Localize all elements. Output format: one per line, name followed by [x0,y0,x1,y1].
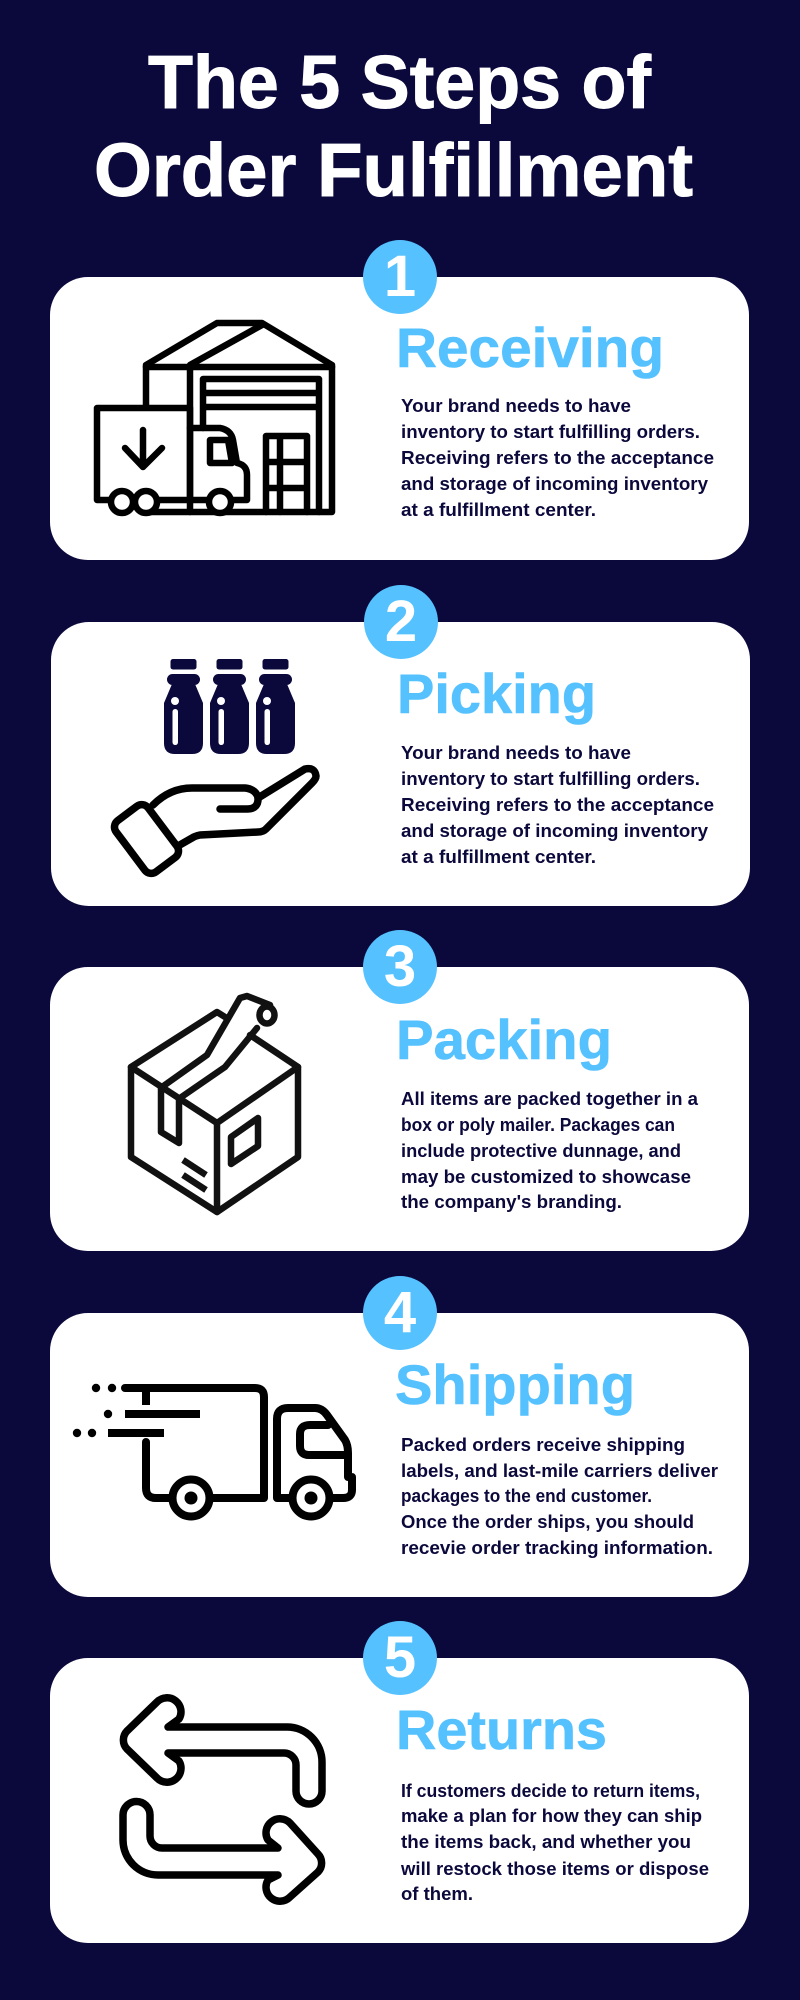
text: packing description [401,1089,699,1212]
step number 2: 2 [385,589,417,654]
text: packing description: may be customized to showcase [401,1167,691,1187]
text: shipping description: Once the order ships, you should [401,1512,694,1532]
step number 1 [363,240,437,314]
heading: receiving: Receiving [396,316,664,379]
text: receiving description: and storage of incoming inventory [401,474,708,494]
icon: delivery truck [73,1384,352,1516]
text: packing description: the company's branding. [401,1192,622,1212]
text: shipping description [401,1435,718,1558]
text: receiving description: Your brand needs to have [401,396,631,416]
text: shipping description: packages to the end customer. [401,1486,652,1506]
title [94,40,693,212]
text: receiving description [401,396,714,520]
text: returns description: of them. [401,1884,473,1904]
text: returns description [400,1781,709,1904]
text: returns description: will restock those items or dispose [400,1859,709,1879]
panel: step 2 picking [51,585,750,906]
icon: bottles [164,659,295,754]
text: packing description: box or poly mailer. Packages can [401,1115,675,1135]
panel: step 1 receiving [50,240,749,560]
heading: shipping: Shipping [395,1353,635,1416]
step number 5: 5 [384,1625,416,1690]
panel: step 3 packing [50,930,749,1251]
text: receiving description: Receiving refers to the acceptance [401,448,714,468]
text: receiving description: inventory to start fulfilling orders. [401,422,700,442]
icon: open hand [111,769,316,877]
panel: step 5 returns [50,1621,749,1943]
title: The 5 Steps of [148,40,652,124]
text: packing description: include protective dunnage, and [401,1141,681,1161]
icon: warehouse and truck [97,323,332,513]
text: returns description: If customers decide to return items, [401,1781,700,1801]
step number 5 [363,1621,437,1695]
text: shipping description: Packed orders receive shipping [401,1435,685,1455]
text: picking description: and storage of incoming inventory [401,821,708,841]
step number 4 [363,1276,437,1350]
heading: packing: Packing [396,1008,612,1071]
text: packing description: All items are packed together in a [401,1089,699,1109]
text: shipping description: recevie order tracking information. [401,1538,713,1558]
panel: step 4 shipping [50,1276,749,1597]
step number 3: 3 [384,934,416,999]
step number 2 [364,585,438,659]
text: returns description: make a plan for how they can ship [401,1806,702,1826]
step number 3 [363,930,437,1004]
text: picking description: at a fulfillment center. [401,847,596,867]
text: returns description: the items back, and whether you [401,1832,691,1852]
title: Order Fulfillment [94,128,693,212]
text: receiving description: at a fulfillment center. [401,500,596,520]
text: picking description: Your brand needs to have [401,743,631,763]
step number 4: 4 [384,1280,416,1345]
text: picking description: inventory to start fulfilling orders. [401,769,700,789]
text: shipping description: labels, and last-mile carriers deliver [401,1461,718,1481]
icon: taped box [131,996,298,1212]
heading: returns: Returns [396,1698,607,1761]
icon: return arrows [123,1698,322,1901]
text: picking description: Receiving refers to the acceptance [401,795,714,815]
step number 1: 1 [384,244,416,309]
heading: picking: Picking [397,662,596,725]
text: picking description [401,743,714,867]
